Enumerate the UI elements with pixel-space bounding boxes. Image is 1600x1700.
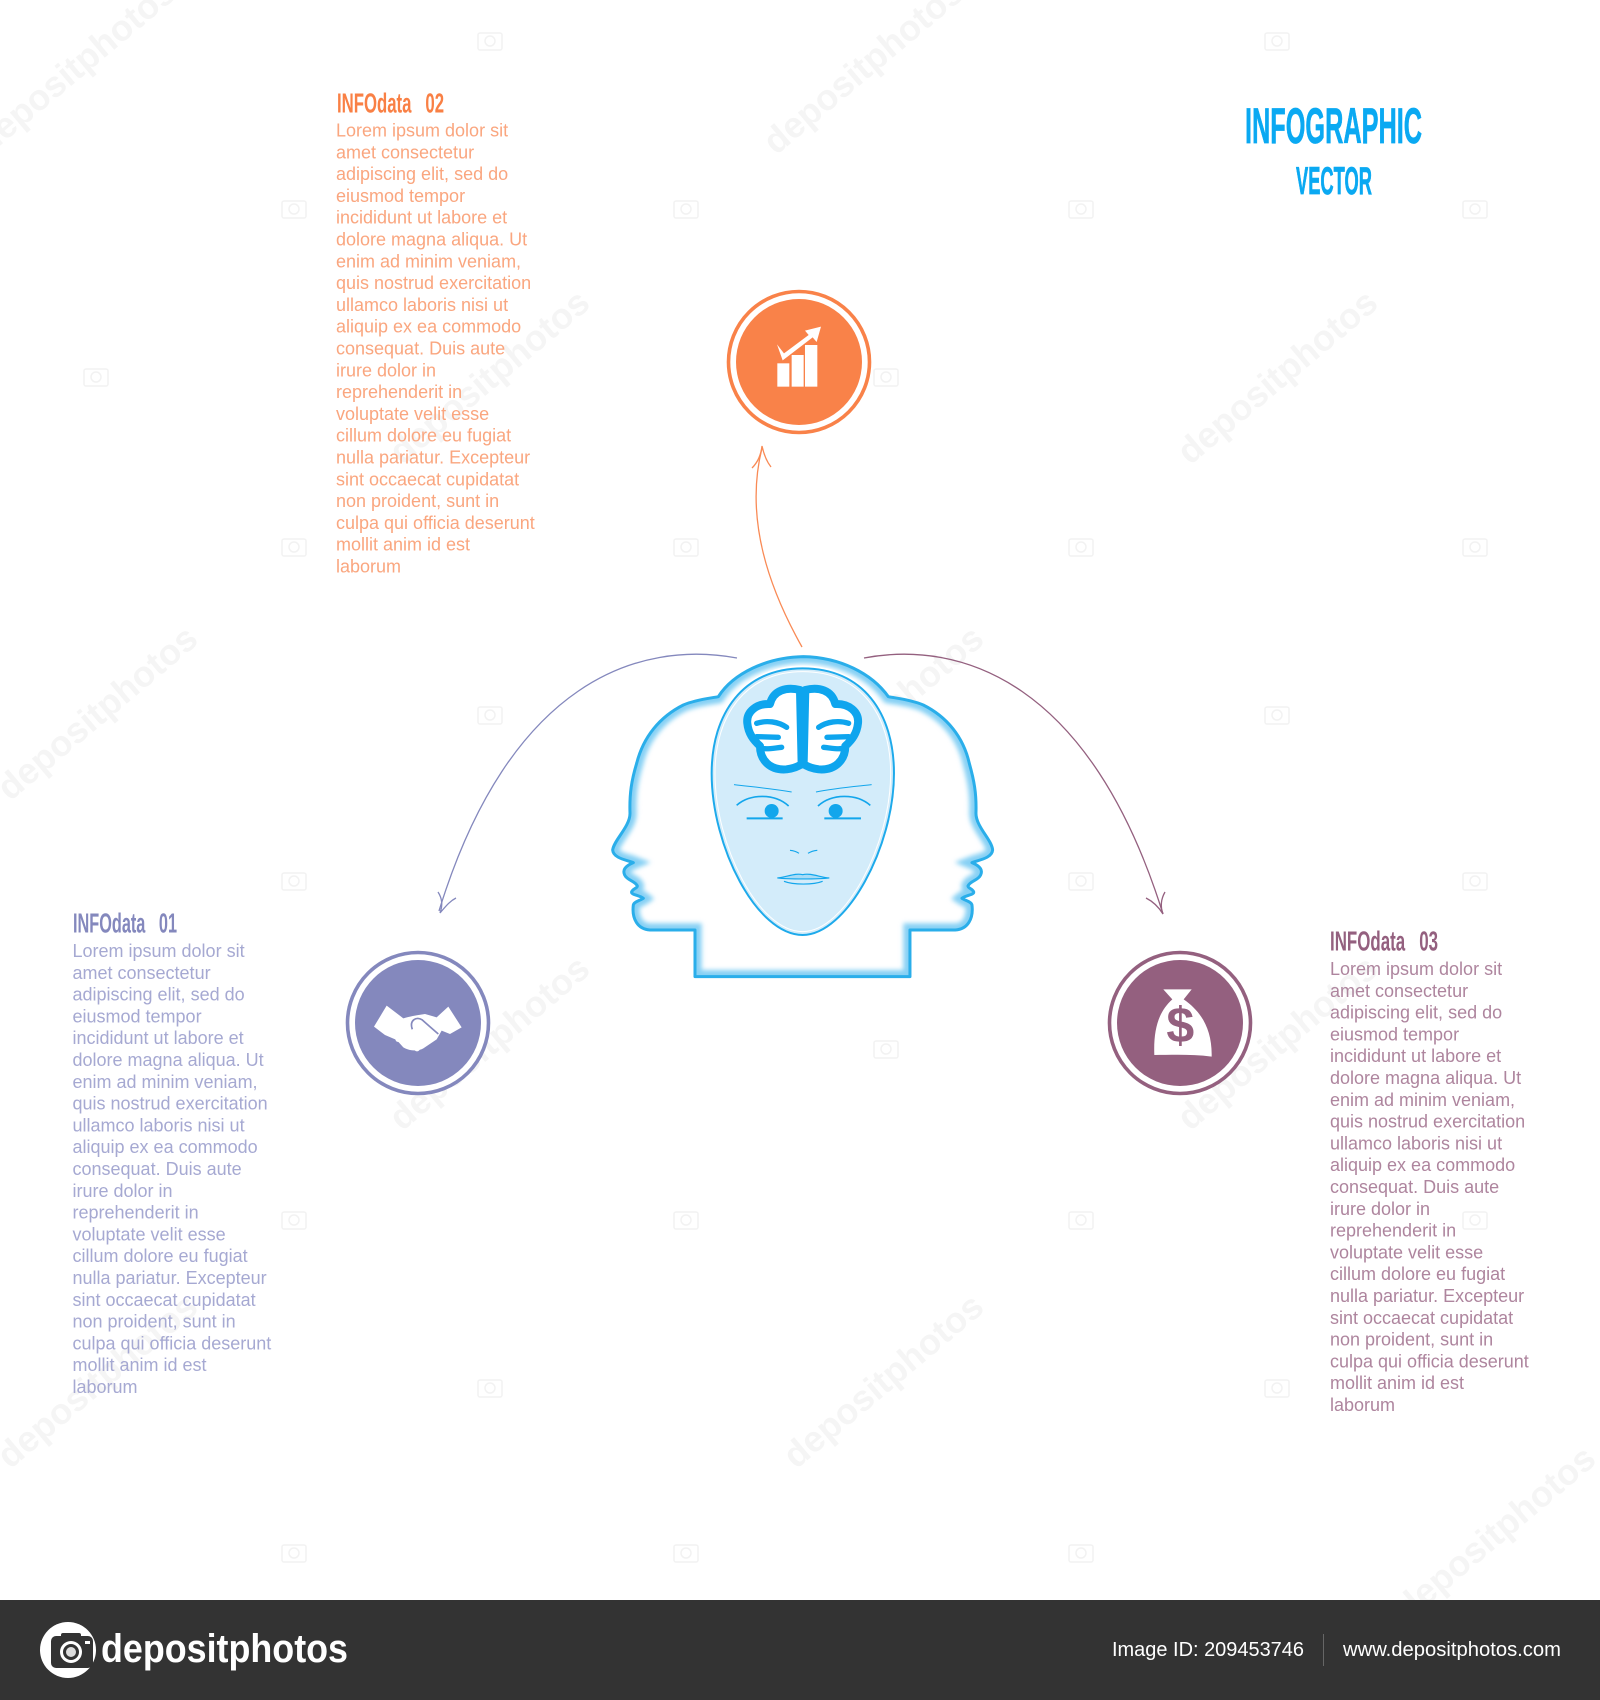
text block: INFOdata 02: adipiscing elit, sed do (336, 164, 508, 184)
text block: INFOdata 03: reprehenderit in (1330, 1221, 1456, 1241)
logo: depositphotos (101, 1627, 348, 1671)
text block: INFOdata 01: eiusmod tempor (72, 1006, 202, 1026)
icon: money bag: $ (1166, 997, 1194, 1053)
circle: chart icon (728, 292, 870, 432)
text block: INFOdata 02: sint occaecat cupidatat (336, 469, 519, 489)
text block: INFOdata 01: non proident, sunt in (72, 1312, 236, 1332)
text block: INFOdata 03: eiusmod tempor (1330, 1024, 1459, 1044)
text block: INFOdata 02: reprehenderit in (336, 382, 462, 402)
icon: rising bar chart (777, 327, 821, 387)
text block: INFOdata 01: nulla pariatur. Excepteur (72, 1268, 267, 1288)
title: VECTOR (1296, 160, 1372, 203)
text block: INFOdata 02: voluptate velit esse (336, 404, 489, 424)
text block: INFOdata 03: Lorem ipsum dolor sit (1330, 959, 1502, 979)
text block: INFOdata 02: dolore magna aliqua. Ut (336, 230, 527, 250)
text block: INFOdata 02: nulla pariatur. Excepteur (336, 447, 530, 467)
text block: INFOdata 03 (1330, 926, 1534, 1415)
text block: INFOdata 02 (336, 88, 540, 576)
text block: INFOdata 02: INFOdata 02 (337, 88, 444, 118)
central double-profile head (613, 657, 993, 977)
nose and mouth (777, 850, 829, 884)
text block: INFOdata 03: dolore magna aliqua. Ut (1330, 1068, 1521, 1088)
text block: INFOdata 01: adipiscing elit, sed do (72, 985, 245, 1005)
text block: INFOdata 02: irure dolor in (336, 360, 436, 380)
eyes and brows (734, 785, 872, 818)
icon: brain (747, 689, 858, 769)
website: www.depositphotos.com (1342, 1639, 1561, 1661)
text block: INFOdata 02: non proident, sunt in (336, 491, 499, 511)
text block: INFOdata 02: culpa qui officia deserunt (336, 513, 535, 533)
text block: INFOdata 03: amet consectetur (1330, 981, 1468, 1001)
text block: INFOdata 01: culpa qui officia deserunt (72, 1333, 271, 1353)
text block: INFOdata 02: incididunt ut labore et (336, 208, 507, 228)
watermark pattern: depositphotos (775, 1285, 991, 1476)
text block: INFOdata 01: laborum (72, 1377, 138, 1397)
text block: INFOdata 03: nulla pariatur. Excepteur (1330, 1286, 1524, 1306)
text block: INFOdata 01: irure dolor in (72, 1181, 173, 1201)
text block: INFOdata 02: laborum (336, 556, 401, 576)
face oval (709, 666, 897, 938)
text block: INFOdata 01: sint occaecat cupidatat (72, 1290, 256, 1310)
text block: INFOdata 01: quis nostrud exercitation (72, 1094, 268, 1114)
text block: INFOdata 02: consequat. Duis aute (336, 338, 505, 358)
text block: INFOdata 01: INFOdata 01 (73, 908, 177, 938)
text block: INFOdata 03: laborum (1330, 1395, 1395, 1415)
text block: INFOdata 02: mollit anim id est (336, 535, 470, 555)
title (1245, 98, 1422, 203)
text block: INFOdata 03: voluptate velit esse (1330, 1242, 1483, 1262)
watermark pattern: depositphotos (775, 617, 991, 808)
icon: money bag (1154, 989, 1212, 1057)
text block: INFOdata 03: aliquip ex ea commodo (1330, 1155, 1515, 1175)
text block: INFOdata 01: ullamco laboris nisi ut (72, 1115, 245, 1135)
text block: INFOdata 01 (72, 908, 276, 1397)
text block: INFOdata 02: quis nostrud exercitation (336, 273, 531, 293)
text block: INFOdata 03: non proident, sunt in (1330, 1330, 1493, 1350)
watermark pattern: depositphotos (1169, 947, 1385, 1138)
text block: INFOdata 02: enim ad minim veniam, (336, 251, 521, 271)
text block: INFOdata 01: incididunt ut labore et (72, 1028, 244, 1048)
text block: INFOdata 02: amet consectetur (336, 142, 474, 162)
text block: INFOdata 03: INFOdata 03 (1330, 926, 1438, 956)
watermark pattern: depositphotos (381, 281, 597, 472)
footer bar (0, 1600, 1600, 1700)
head outline with inner glow (613, 657, 993, 977)
text block: INFOdata 02: Lorem ipsum dolor sit (336, 120, 508, 140)
text block: INFOdata 03: quis nostrud exercitation (1330, 1112, 1525, 1132)
text block: INFOdata 03: cillum dolore eu fugiat (1330, 1264, 1505, 1284)
text block: INFOdata 01: consequat. Duis aute (72, 1159, 242, 1179)
text block: INFOdata 03: ullamco laboris nisi ut (1330, 1133, 1502, 1153)
circle: money bag icon (1110, 952, 1250, 1094)
arrow: head to chart circle (752, 446, 802, 647)
text block: INFOdata 02: cillum dolore eu fugiat (336, 426, 511, 446)
circle: handshake icon (348, 952, 488, 1094)
title: INFOGRAPHIC (1245, 98, 1422, 154)
text block: INFOdata 03: consequat. Duis aute (1330, 1177, 1499, 1197)
text block: INFOdata 02: eiusmod tempor (336, 186, 465, 206)
icon: handshake (374, 1006, 462, 1051)
text block: INFOdata 03: incididunt ut labore et (1330, 1046, 1501, 1066)
text block: INFOdata 03: mollit anim id est (1330, 1373, 1464, 1393)
watermark pattern: depositphotos (381, 947, 597, 1138)
text block: INFOdata 01: dolore magna aliqua. Ut (72, 1050, 264, 1070)
image id: Image ID: 209453746 (1112, 1639, 1304, 1661)
text block: INFOdata 03: culpa qui officia deserunt (1330, 1351, 1529, 1371)
text block: INFOdata 03: enim ad minim veniam, (1330, 1090, 1515, 1110)
arrow: head to money circle (864, 654, 1165, 914)
text block: INFOdata 01: voluptate velit esse (72, 1224, 226, 1244)
text block: INFOdata 01: aliquip ex ea commodo (72, 1137, 258, 1157)
text block: INFOdata 01: enim ad minim veniam, (72, 1072, 258, 1092)
text block: INFOdata 03: adipiscing elit, sed do (1330, 1003, 1502, 1023)
text block: INFOdata 01: reprehenderit in (72, 1203, 199, 1223)
text block: INFOdata 03: sint occaecat cupidatat (1330, 1308, 1513, 1328)
text block: INFOdata 01: cillum dolore eu fugiat (72, 1246, 248, 1266)
text block: INFOdata 01: amet consectetur (72, 963, 211, 983)
logo (40, 1622, 348, 1678)
text block: INFOdata 03: irure dolor in (1330, 1199, 1430, 1219)
text block: INFOdata 02: ullamco laboris nisi ut (336, 295, 508, 315)
text block: INFOdata 01: Lorem ipsum dolor sit (72, 941, 245, 961)
watermark pattern: depositphotos (1387, 1437, 1600, 1628)
arrow: head to handshake circle (438, 654, 737, 913)
text block: INFOdata 01: mollit anim id est (72, 1355, 207, 1375)
watermark pattern: depositphotos (1169, 281, 1385, 472)
text block: INFOdata 02: aliquip ex ea commodo (336, 317, 521, 337)
